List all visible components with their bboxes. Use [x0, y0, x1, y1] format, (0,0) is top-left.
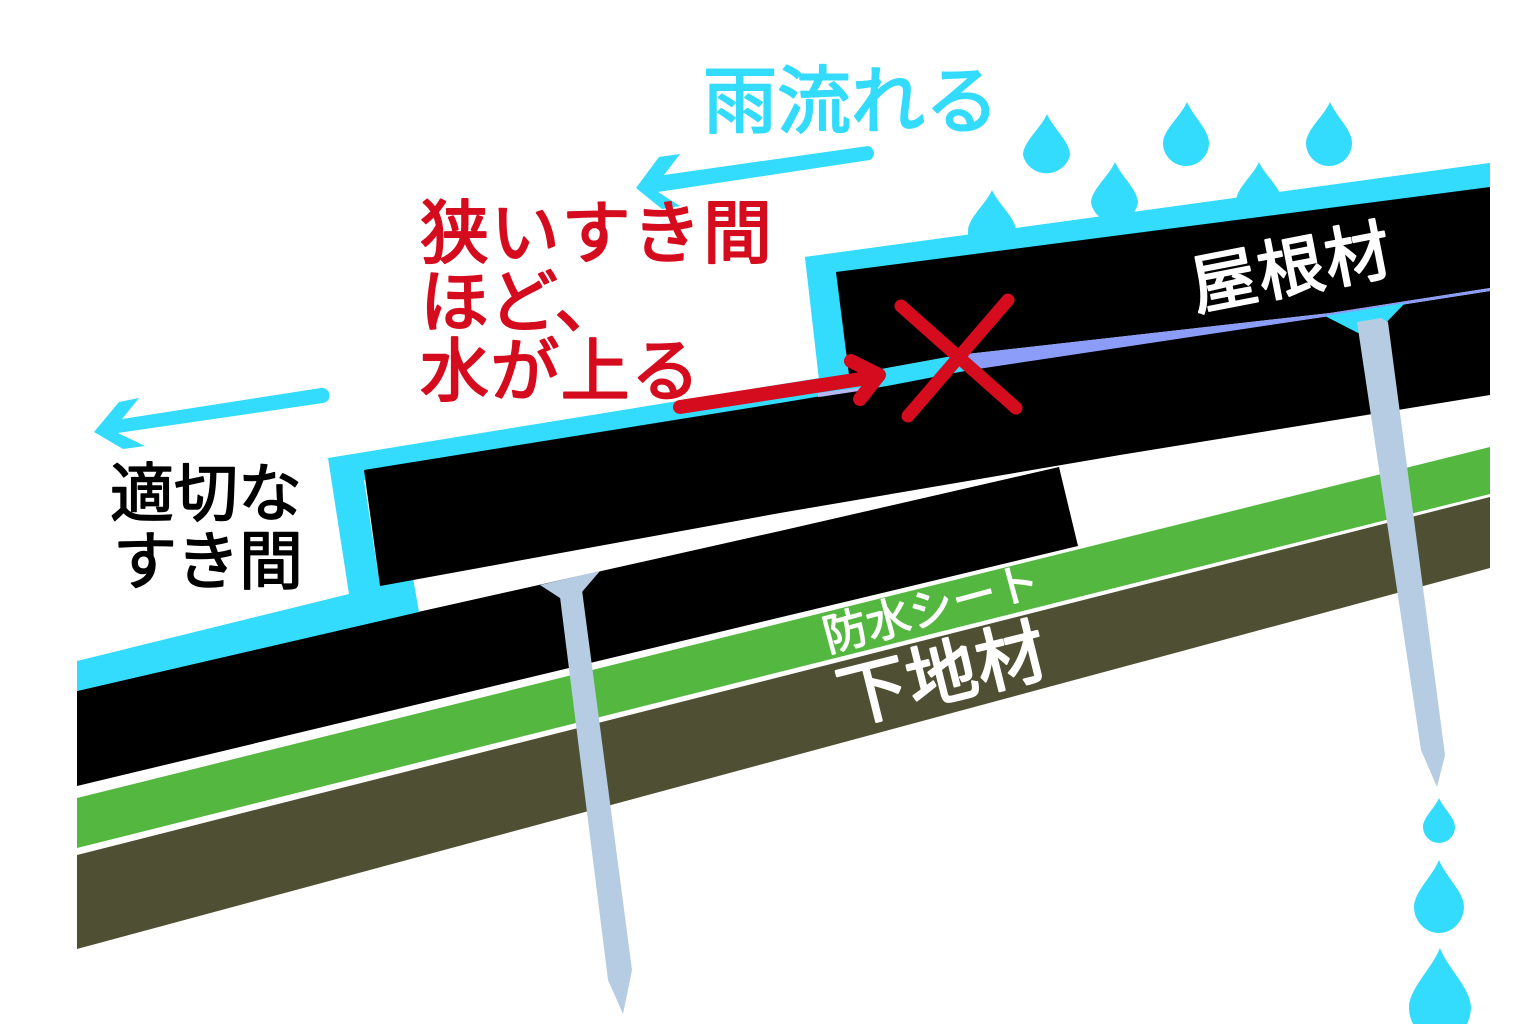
drop: [1306, 102, 1352, 166]
label: roofing material: 屋根材: [1185, 213, 1397, 324]
falling rain drops: [1023, 102, 1352, 173]
lower roof plate: [77, 467, 1078, 786]
drop: [968, 190, 1016, 250]
nail left: [540, 571, 632, 1014]
base board layer: [77, 497, 1490, 949]
drop small: [1423, 798, 1455, 843]
upper roof plate: [836, 187, 1490, 375]
rising water in narrow gap: [958, 288, 1490, 372]
red X mark: [901, 300, 1016, 416]
drop large: [1409, 948, 1471, 1024]
label: base board: 下地材: [830, 612, 1054, 739]
nail head: [540, 571, 600, 598]
nail shaft: [1357, 318, 1445, 787]
black label: proper gap: [110, 458, 303, 598]
label: waterproof sheet: 防水シート: [818, 557, 1045, 662]
drop medium: [1414, 860, 1464, 933]
arrow: rain flow top: [636, 146, 874, 209]
line 2: ほど、: [420, 264, 624, 341]
heading: rain flows: 雨流れる: [703, 60, 999, 143]
upper cap water film top edge: [805, 163, 1490, 380]
nail shaft: [560, 590, 632, 1014]
line 1: 狭いすき間: [420, 195, 772, 272]
nail head with water: [1325, 303, 1405, 333]
waterproof sheet layer: [77, 447, 1490, 848]
nail right: [1325, 303, 1445, 787]
line 3: 水が上る: [420, 333, 700, 410]
arrow: rain flow lower: [94, 388, 330, 449]
lavender water sliver: [818, 387, 866, 397]
arrow: water rising red: [680, 361, 879, 407]
middle roof plate: [364, 291, 1490, 586]
red callout text: [420, 195, 772, 410]
leaking drops: [1409, 798, 1471, 1024]
drop: [1163, 102, 1209, 166]
line 2: すき間: [113, 526, 303, 598]
drop: [1091, 162, 1138, 222]
drop: [1236, 162, 1282, 222]
rain drops touching the roof: [968, 162, 1282, 250]
drop: [1023, 114, 1070, 173]
lower water film: [77, 163, 1490, 691]
cyan water in gap: [820, 354, 965, 397]
line 1: 適切な: [110, 458, 302, 530]
